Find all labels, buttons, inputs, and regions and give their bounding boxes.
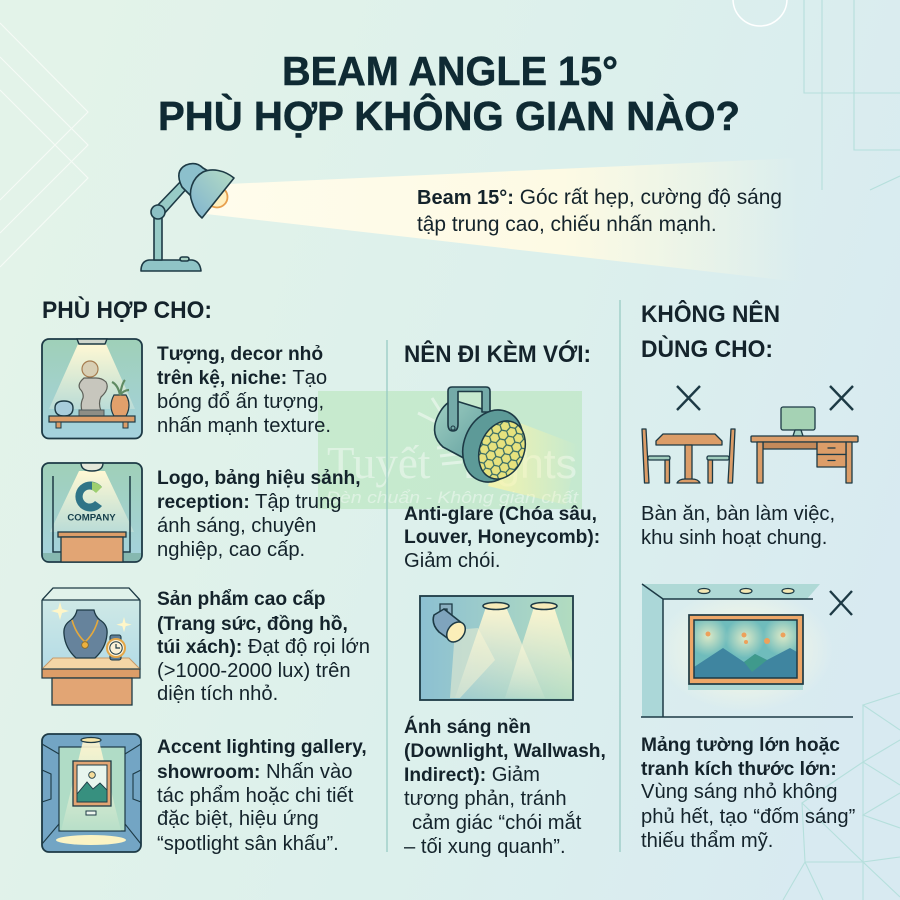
heading: do not use: DÙNG CHO: (641, 335, 773, 363)
text: large walls: phủ hết, tạo “đốm sáng” (641, 806, 855, 828)
text: accent lighting: đặc biệt, hiệu ứng (157, 808, 319, 830)
watermark: Đèn chuẩn - Không gian chất (326, 488, 579, 507)
text: logo: ánh sáng, chuyên (157, 515, 316, 537)
heading: suitable for: PHÙ HỢP CHO: (42, 296, 212, 324)
divider lines (387, 300, 620, 852)
text: logo: nghiệp, cao cấp. (157, 539, 305, 561)
watermark (318, 391, 582, 509)
text: accent lighting: Accent lighting gallery, (157, 737, 367, 758)
text: ambient lighting: Ánh sáng nền (404, 716, 531, 738)
text: statue: bóng đổ ấn tượng, (157, 391, 324, 413)
text: logo: reception: Tập trung (157, 491, 341, 513)
text: large walls: Mảng tường lớn hoặc (641, 735, 840, 756)
heading: pair with: NÊN ĐI KÈM VỚI: (404, 340, 591, 368)
icon: company logo: COMPANY (67, 512, 116, 524)
text: premium products: túi xách): Đạt độ rọi lớn (157, 636, 370, 658)
icon: company logo (42, 463, 142, 562)
text: anti-glare: Anti-glare (Chóa sâu, (404, 504, 597, 525)
beam description: tập trung cao, chiếu nhấn mạnh. (417, 213, 717, 236)
text: logo: Logo, bảng hiệu sảnh, (157, 468, 361, 489)
text: statue: nhấn mạnh texture. (157, 415, 331, 437)
text: accent lighting: showroom: Nhấn vào (157, 761, 352, 783)
text: ambient lighting: (Downlight, Wallwash, (404, 741, 606, 762)
text: anti-glare: Louver, Honeycomb): (404, 527, 600, 548)
heading: do not use (641, 300, 780, 363)
text: premium products: (>1000-2000 lux) trên (157, 660, 351, 682)
icon: ambient lighting room (420, 596, 573, 700)
text: premium products: diện tích nhỏ. (157, 683, 278, 705)
text: dining and office: khu sinh hoạt chung. (641, 527, 827, 549)
text: ambient lighting: tương phản, tránh (404, 788, 567, 810)
text: large walls: tranh kích thước lớn: (641, 759, 837, 780)
icon: large wall painting with cross (641, 584, 853, 717)
icon: gallery artwork (42, 734, 141, 852)
title: BEAM ANGLE 15° (282, 48, 618, 94)
text: ambient lighting: cảm giác “chói mắt (412, 811, 582, 834)
text: large walls: thiếu thẩm mỹ. (641, 830, 773, 852)
title (158, 48, 740, 139)
light beam (206, 158, 800, 282)
text: premium products: Sản phẩm cao cấp (157, 589, 325, 610)
icon: jewelry display case (42, 588, 140, 705)
icon: desk lamp (141, 164, 234, 271)
text: ambient lighting: – tối xung quanh”. (404, 836, 566, 858)
title: PHÙ HỢP KHÔNG GIAN NÀO? (158, 93, 740, 139)
text: anti-glare: Giảm chói. (404, 550, 500, 572)
text: statue: trên kệ, niche: Tạo (157, 367, 327, 389)
text: dining and office: Bàn ăn, bàn làm việc, (641, 503, 835, 525)
text: statue: Tượng, decor nhỏ (157, 344, 323, 365)
watermark: Tuyết (327, 438, 431, 488)
text: premium products: (Trang sức, đồng hồ, (157, 614, 348, 635)
panel: suitable for (42, 296, 370, 855)
watermark: Lights (463, 440, 577, 487)
text: large walls: Vùng sáng nhỏ không (641, 781, 837, 803)
text: ambient lighting: Indirect): Giảm (404, 764, 540, 786)
icon: dining and office furniture with crosses (642, 386, 858, 483)
text: accent lighting: tác phẩm hoặc chi tiết (157, 785, 354, 807)
heading: do not use: KHÔNG NÊN (641, 300, 780, 328)
panel: pair with (404, 340, 606, 858)
beam description: Beam 15°: Góc rất hẹp, cường độ sáng (417, 186, 782, 209)
text: accent lighting: “spotlight sân khấu”. (157, 833, 339, 855)
icon: statue on shelf (42, 339, 142, 438)
panel: do not use (641, 300, 858, 852)
icon: anti-glare spotlight (435, 387, 578, 505)
